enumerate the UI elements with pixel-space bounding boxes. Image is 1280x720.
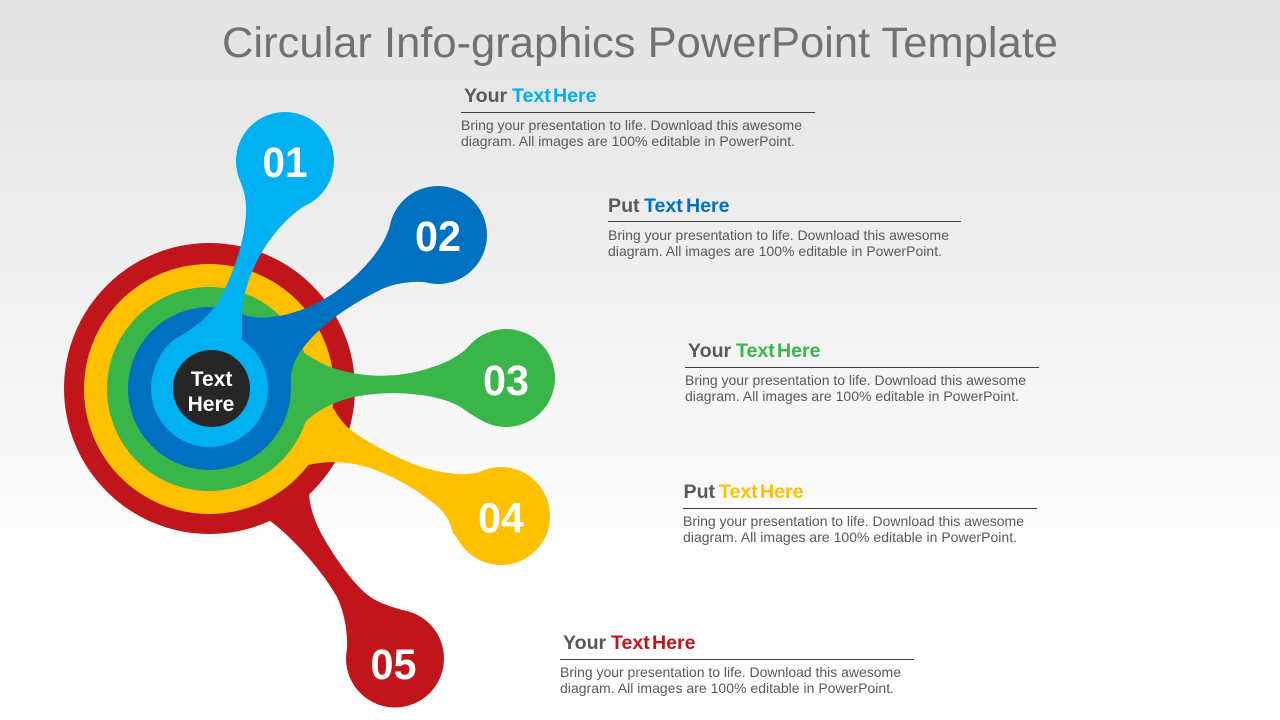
text block 04: Text (719, 481, 758, 503)
text block 03 (685, 340, 1039, 404)
text block 02: Put (608, 195, 640, 217)
text block 01: Your (464, 85, 508, 107)
text block 03: diagram. All images are 100% editable in PowerPoint. (685, 388, 1019, 404)
title: Circular Info-graphics PowerPoint Template (222, 19, 1058, 67)
text block 05: Text (611, 632, 650, 654)
text block 02 (608, 195, 961, 259)
ring and petal 03: green (107, 287, 555, 491)
text block 03: Bring your presentation to life. Download this awesome (685, 372, 1026, 388)
text block 03: Your (688, 340, 732, 362)
number 03: 03 (483, 357, 529, 405)
text block 02: Text (644, 195, 683, 217)
center hub: Here (188, 393, 234, 416)
text block 04: diagram. All images are 100% editable in PowerPoint. (683, 529, 1017, 545)
text block 02: Here (686, 195, 730, 217)
circular diagram (64, 112, 555, 708)
text block 02: Bring your presentation to life. Download this awesome (608, 227, 949, 243)
text block 01: diagram. All images are 100% editable in PowerPoint. (461, 133, 795, 149)
ring and petal 01: cyan (151, 112, 334, 447)
center hub (173, 350, 250, 427)
text block 01 (461, 85, 815, 149)
text block 04: Put (684, 481, 716, 503)
text block 05: Bring your presentation to life. Download this awesome (560, 664, 901, 680)
text block 05: Your (563, 632, 607, 654)
ring and petal 02: blue (128, 186, 487, 470)
text block 05 (560, 632, 914, 696)
text block 01: Text (512, 85, 551, 107)
number 05: 05 (370, 641, 416, 689)
ring and petal 05: red (64, 243, 444, 708)
text block 02: diagram. All images are 100% editable in PowerPoint. (608, 243, 942, 259)
text block 04 (683, 481, 1037, 545)
number 04: 04 (478, 494, 524, 542)
number 02: 02 (415, 213, 461, 261)
text block 01: Bring your presentation to life. Download this awesome (461, 117, 802, 133)
text block 01: Here (553, 85, 597, 107)
text block 03: Here (777, 340, 821, 362)
text block 05: Here (652, 632, 696, 654)
ring and petal 04: yellow (84, 264, 550, 565)
text block 04: Here (760, 481, 804, 503)
number 01: 01 (262, 139, 308, 187)
center hub: Text (191, 368, 232, 391)
text block 03: Text (736, 340, 775, 362)
text block 05: diagram. All images are 100% editable in PowerPoint. (560, 680, 894, 696)
text block 04: Bring your presentation to life. Download this awesome (683, 513, 1024, 529)
